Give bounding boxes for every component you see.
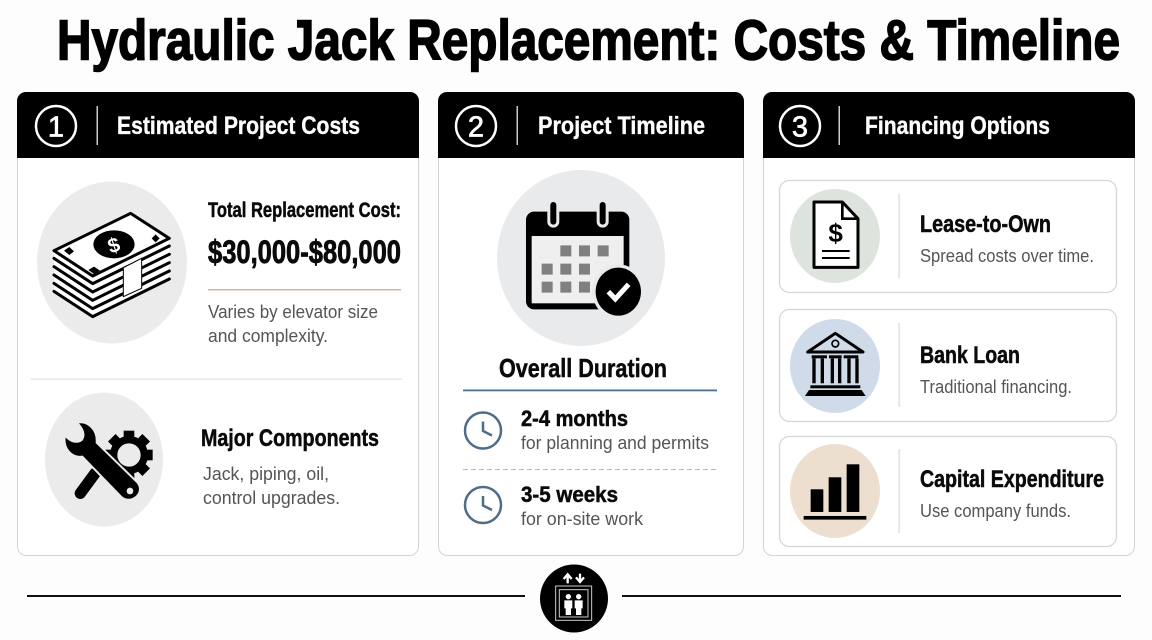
icon: document with dollar: $	[828, 218, 843, 248]
item: planning duration: 2-4 months	[521, 406, 628, 431]
icon: bank building	[790, 319, 880, 413]
icon: money stack	[37, 182, 187, 344]
icon: bar chart	[790, 444, 880, 538]
header: project timeline	[438, 92, 744, 158]
header: project timeline: 2	[468, 112, 484, 144]
icon: calendar with check	[497, 170, 665, 346]
text: total replacement cost: and complexity.	[208, 326, 328, 346]
icon: clock	[465, 412, 501, 448]
panel: project timeline	[438, 92, 744, 556]
card: lease-to-own: Lease-to-Own	[920, 211, 1051, 238]
panel: estimated project costs	[17, 92, 419, 556]
item: planning duration	[465, 406, 709, 453]
text: major components	[201, 425, 379, 508]
card: capital expenditure: Use company funds.	[920, 501, 1071, 521]
icon: clock	[465, 487, 501, 523]
text: total replacement cost: Total Replacement Cost:	[208, 199, 401, 222]
card: lease-to-own	[780, 180, 1116, 292]
text: major components: Jack, piping, oil,	[203, 464, 329, 484]
text: total replacement cost: $30,000-$80,000	[208, 234, 401, 270]
item: on-site duration: for on-site work	[521, 509, 644, 529]
text: major components: control upgrades.	[203, 488, 340, 508]
header: estimated project costs: Estimated Project Costs	[117, 112, 360, 140]
header: financing options: 3	[792, 112, 808, 144]
icon: elevator badge	[540, 564, 608, 632]
icon: document with dollar	[790, 189, 880, 283]
item: on-site duration	[465, 482, 644, 529]
header: estimated project costs	[17, 92, 419, 158]
card: capital expenditure	[780, 436, 1116, 546]
heading: overall duration: Overall Duration	[499, 353, 667, 383]
card: capital expenditure: Capital Expenditure	[920, 466, 1104, 493]
header: financing options	[763, 92, 1135, 158]
card: bank loan: Traditional financing.	[920, 377, 1072, 397]
item: planning duration: for planning and permits	[521, 433, 709, 453]
card: lease-to-own: Spread costs over time.	[920, 246, 1094, 266]
card: bank loan	[780, 310, 1116, 422]
icon: money stack: $	[105, 233, 123, 259]
text: total replacement cost	[208, 199, 401, 346]
text: major components: Major Components	[201, 425, 379, 452]
header: project timeline: Project Timeline	[538, 112, 705, 140]
card: bank loan: Bank Loan	[920, 342, 1020, 369]
panel: financing options	[763, 92, 1135, 556]
header: financing options: Financing Options	[865, 112, 1050, 140]
footer rule	[27, 595, 1121, 597]
text: total replacement cost: Varies by elevator size	[208, 302, 378, 322]
header: estimated project costs: 1	[48, 112, 64, 144]
item: on-site duration: 3-5 weeks	[521, 482, 618, 507]
icon: wrench and gear	[45, 392, 163, 526]
